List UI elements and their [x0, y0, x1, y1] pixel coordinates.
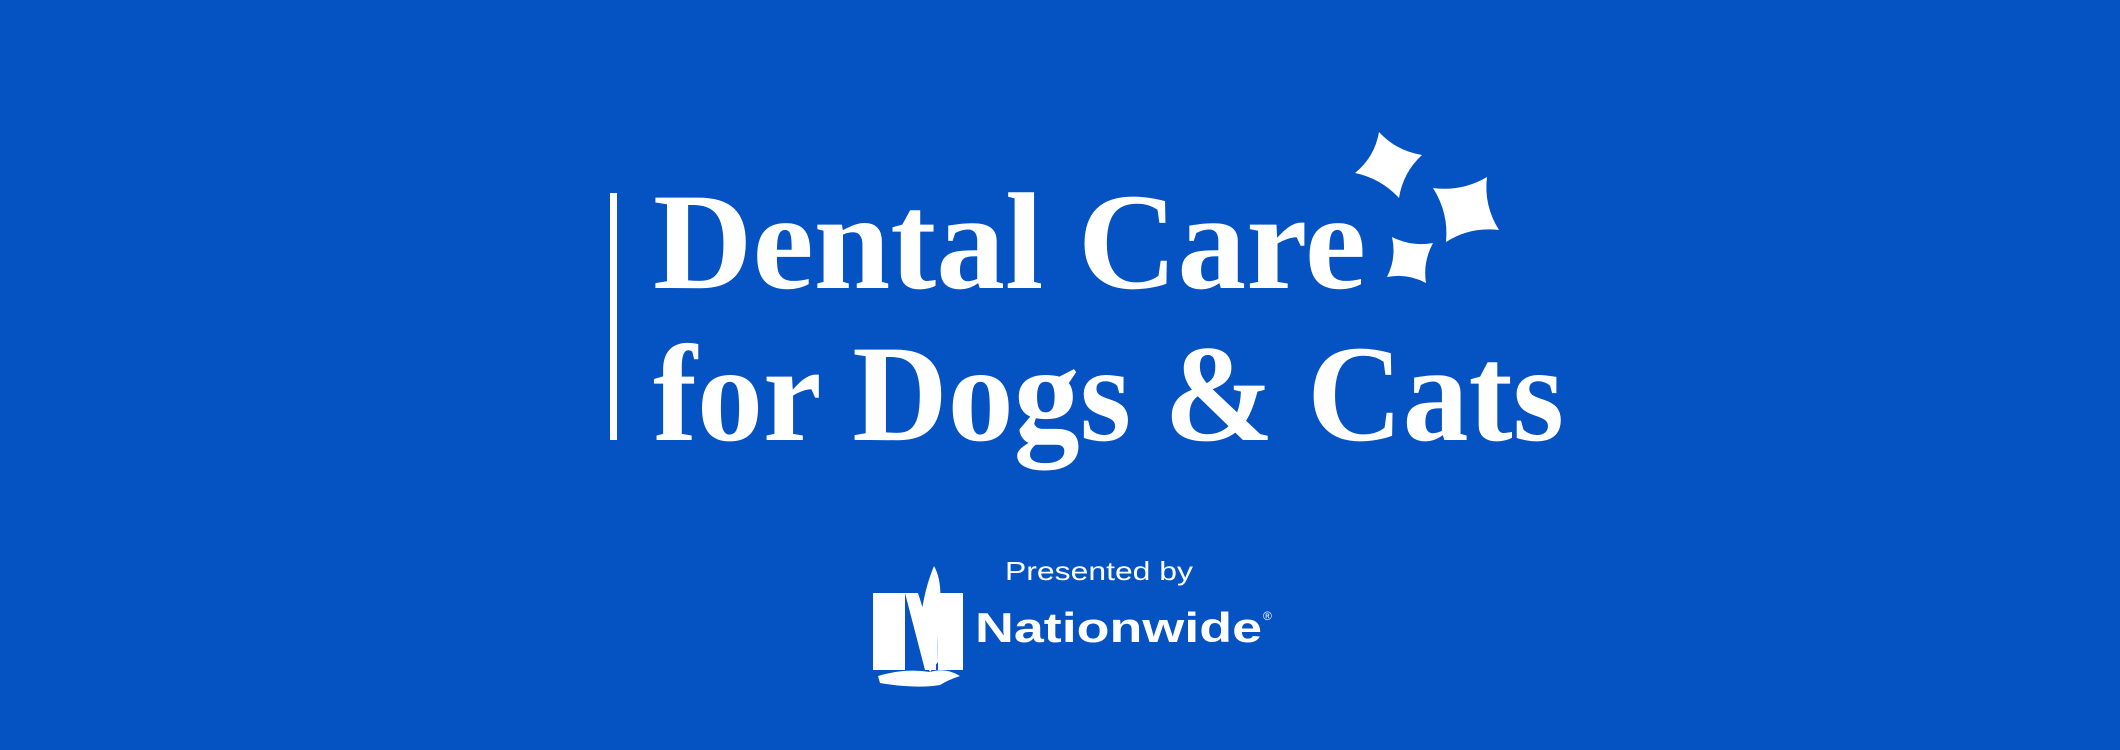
vertical accent bar: [610, 193, 617, 440]
title line 1: Dental Care: [653, 165, 1366, 318]
logo: Nationwide: [873, 566, 1272, 687]
wordmark: Nationwide: [975, 604, 1262, 651]
presented by text: Presented by: [1005, 556, 1193, 586]
title block: [610, 165, 1564, 470]
icon: N with eagle: [873, 566, 963, 687]
registered mark: ®: [1263, 609, 1272, 623]
icon: sparkles: [1355, 132, 1499, 283]
title line 2: for Dogs & Cats: [653, 317, 1564, 470]
